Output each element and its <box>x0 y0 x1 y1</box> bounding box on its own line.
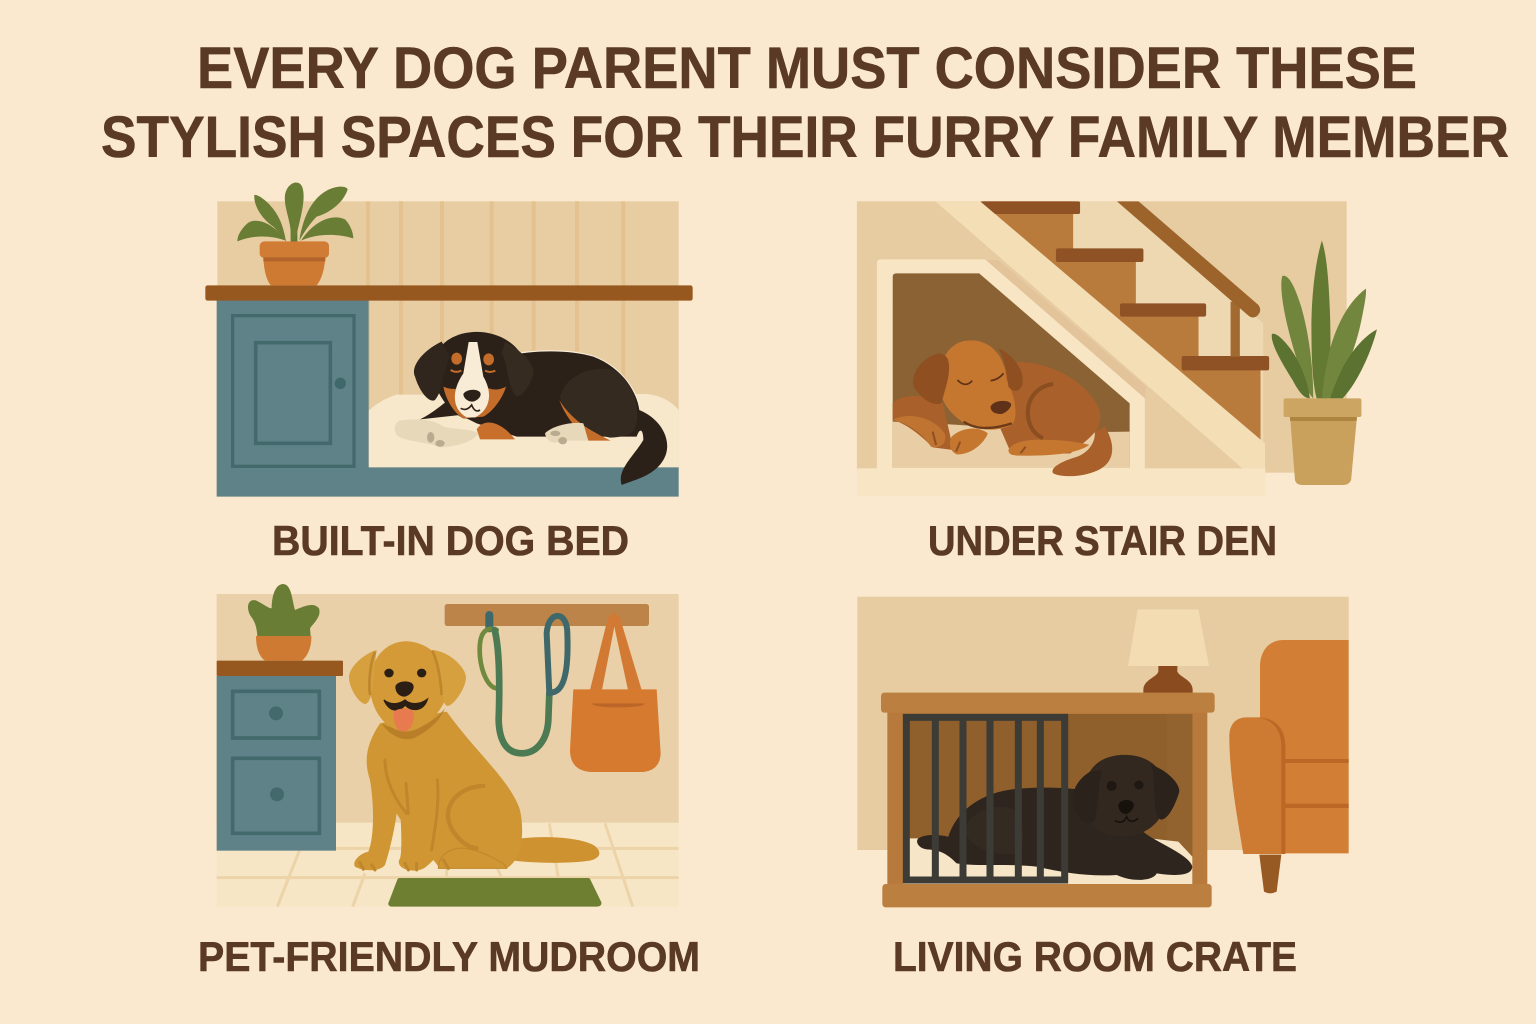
wall rail <box>445 604 649 626</box>
table lamp <box>1128 609 1209 693</box>
wall <box>857 597 1349 850</box>
crate door bars <box>906 717 1065 880</box>
label: built-in dog bed: BUILT-IN DOG BED <box>272 517 629 564</box>
shelf <box>205 285 693 301</box>
cabinet <box>217 300 679 497</box>
panelled wall <box>217 201 679 471</box>
title: EVERY DOG PARENT MUST CONSIDER THESE <box>197 36 1417 101</box>
wall <box>217 594 679 824</box>
wall between stairs and handrail <box>988 201 1263 443</box>
den interior <box>893 273 1130 467</box>
wall <box>857 201 1347 473</box>
tile floor <box>217 823 679 907</box>
wooden crate <box>881 693 1215 907</box>
cushion bed <box>369 394 679 467</box>
stringer shadow <box>986 260 1146 398</box>
dog: black lab <box>917 755 1192 880</box>
armchair <box>1229 640 1349 893</box>
panel: pet-friendly mudroom <box>217 584 679 907</box>
label: pet-friendly mudroom: PET-FRIENDLY MUDROOM <box>198 933 700 980</box>
dog: golden retriever <box>349 641 599 871</box>
leash <box>480 615 568 753</box>
title <box>101 36 1509 170</box>
panel: under stair den <box>857 201 1377 496</box>
icon: potted plant <box>237 183 353 285</box>
stair stringer <box>935 201 1265 470</box>
panel: living room crate <box>857 597 1349 907</box>
icon: snake plant <box>1272 241 1377 485</box>
panel: built-in dog bed <box>205 183 693 497</box>
dog: sleeping brown <box>893 340 1112 476</box>
den frame <box>877 259 1145 470</box>
den floor frame <box>857 468 1265 496</box>
label: under stair den: UNDER STAIR DEN <box>928 517 1277 564</box>
tote bag <box>570 613 661 772</box>
handrail <box>1117 201 1260 357</box>
staircase <box>980 201 1269 443</box>
dog: tricolor sleeping <box>395 332 667 485</box>
door mat <box>390 880 599 905</box>
icon: potted plant <box>248 584 320 661</box>
label: living room crate: LIVING ROOM CRATE <box>893 933 1297 980</box>
drawer cabinet <box>217 661 343 851</box>
